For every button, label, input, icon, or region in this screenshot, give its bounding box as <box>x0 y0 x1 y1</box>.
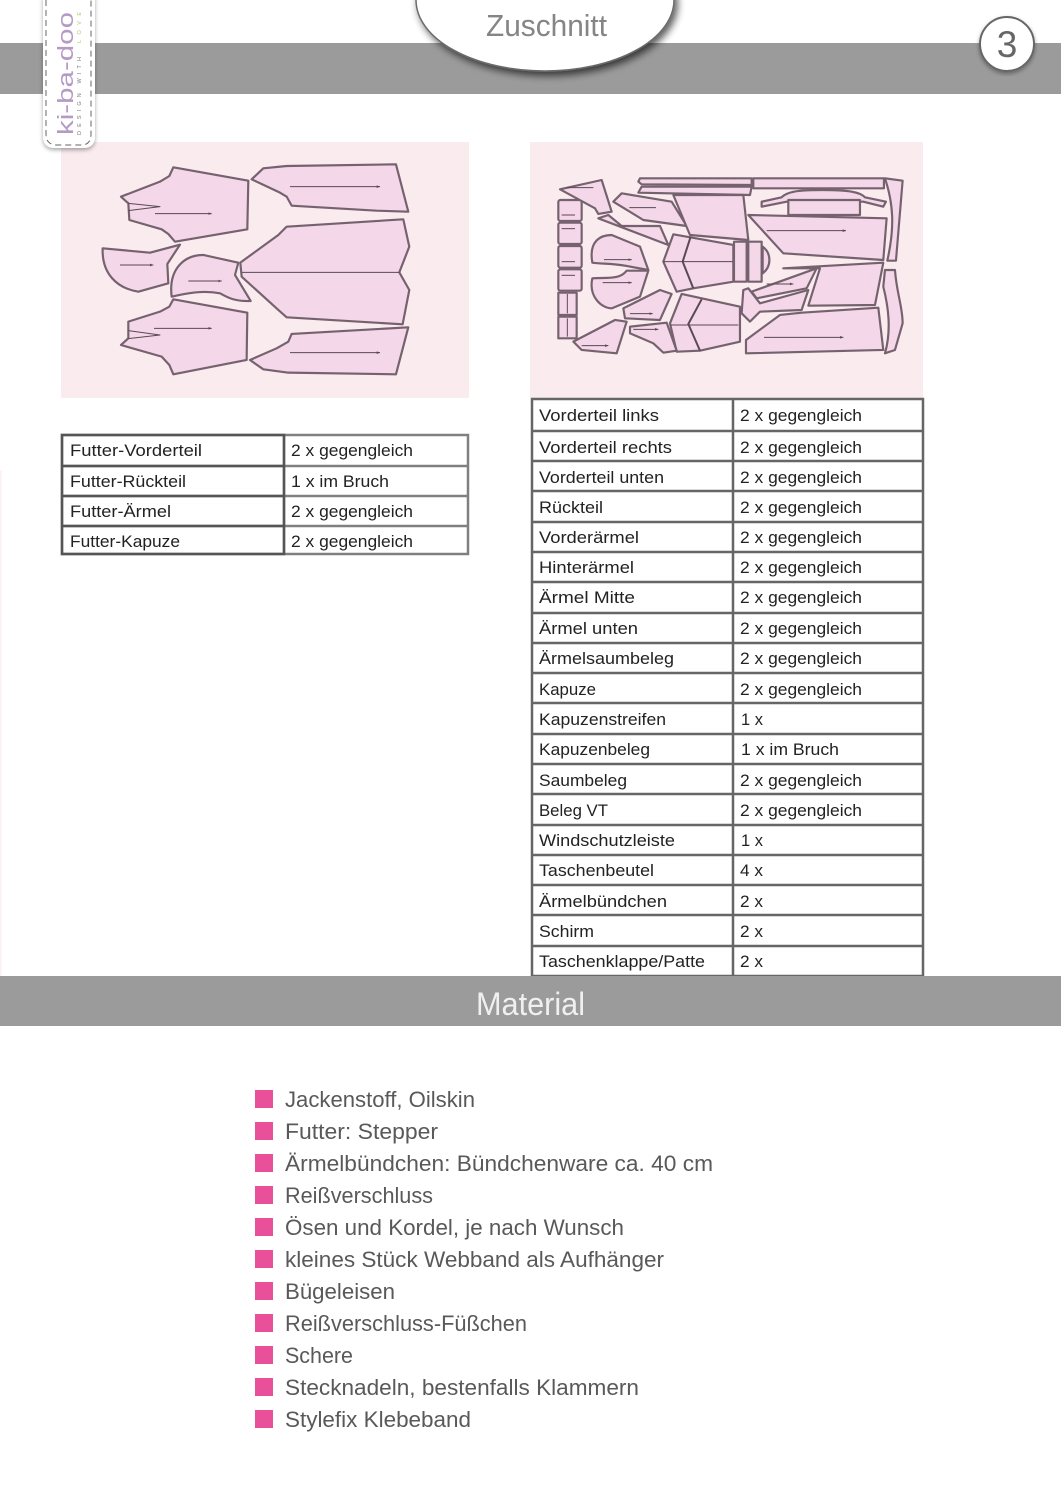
row: Ärmel unten: Ärmel unten <box>539 619 638 638</box>
pattern piece: lining hood <box>103 245 180 292</box>
row: Vorderteil links: 2 x gegengleich <box>740 406 862 425</box>
row: Taschenklappe/Patte: 2 x <box>740 952 763 971</box>
item: Webband: kleines Stück Webband als Aufhänger <box>285 1247 664 1272</box>
row: Kapuze <box>539 680 862 699</box>
row: Taschenklappe/Patte: Taschenklappe/Patte <box>539 952 705 971</box>
panel: pattern layout outer fabric <box>530 142 923 398</box>
row: Futter-Kapuze: 2 x gegengleich <box>291 532 413 551</box>
row: Rückteil: Rückteil <box>539 498 603 517</box>
row: Kapuzenbeleg <box>539 740 839 759</box>
row: Futter-Vorderteil: 2 x gegengleich <box>291 441 413 460</box>
row: Vorderteil links <box>539 406 862 425</box>
logo tag: ki-ba-doo: ki-ba-doo <box>53 12 78 135</box>
panel: pattern layout lining <box>61 142 469 398</box>
pattern piece: lining front top <box>121 167 248 242</box>
item: Stylefix Klebeband: Stylefix Klebeband <box>285 1407 471 1432</box>
row: Kapuzenstreifen <box>539 710 763 729</box>
row: Schirm <box>539 922 763 941</box>
pattern piece: lining front bottom <box>121 299 247 374</box>
table: lining cutting list <box>62 435 468 554</box>
row: Futter-Ärmel: Futter-Ärmel <box>70 502 171 521</box>
row: Saumbeleg <box>539 771 862 790</box>
row: Futter-Kapuze: Futter-Kapuze <box>70 532 180 551</box>
row: Ärmelbündchen <box>539 892 763 911</box>
pattern piece: lining sleeve top <box>252 164 408 212</box>
row: Kapuzenbeleg: 1 x im Bruch <box>741 740 839 759</box>
row: Kapuzenstreifen: Kapuzenstreifen <box>539 710 666 729</box>
pattern pieces: lower right front <box>742 263 883 353</box>
table: outer fabric cutting list <box>532 399 923 976</box>
title tab: Zuschnitt: Zuschnitt <box>486 8 607 43</box>
row: Schirm: 2 x <box>740 922 763 941</box>
row: Ärmel Mitte: 2 x gegengleich <box>740 588 862 607</box>
row: Kapuze: 2 x gegengleich <box>740 680 862 699</box>
pattern piece: upper sleeve top <box>673 195 748 240</box>
row: Futter-Rückteil <box>70 472 389 491</box>
row: Ärmel unten <box>539 619 862 638</box>
pattern piece: lining back <box>240 219 409 324</box>
logo tag: ki-ba-doo <box>43 0 95 148</box>
row: Ärmelsaumbeleg <box>539 649 862 668</box>
row: Hinterärmel: Hinterärmel <box>539 558 634 577</box>
row: Vorderärmel: 2 x gegengleich <box>740 528 862 547</box>
row: Schirm: Schirm <box>539 922 594 941</box>
row: Kapuzenstreifen: 1 x <box>741 710 763 729</box>
row: Saumbeleg: Saumbeleg <box>539 771 627 790</box>
row: Vorderteil rechts: Vorderteil rechts <box>539 438 672 457</box>
row: Windschutzleiste: 1 x <box>741 831 763 850</box>
pattern pieces: peak and pocket <box>762 190 886 215</box>
row: Rückteil: 2 x gegengleich <box>740 498 862 517</box>
pattern pieces: sleeve centre group <box>663 234 769 292</box>
row: Hinterärmel <box>539 558 862 577</box>
row: Vorderteil rechts: 2 x gegengleich <box>740 438 862 457</box>
row: Futter-Kapuze <box>70 532 413 551</box>
row: Futter-Vorderteil <box>70 441 413 460</box>
row: Kapuzenbeleg: Kapuzenbeleg <box>539 740 650 759</box>
row: Futter-Ärmel <box>70 502 413 521</box>
row: Kapuze: Kapuze <box>539 680 596 699</box>
row: Futter-Ärmel: 2 x gegengleich <box>291 502 413 521</box>
row: Rückteil <box>539 498 862 517</box>
row: Vorderteil links: Vorderteil links <box>539 406 659 425</box>
row: Futter-Vorderteil: Futter-Vorderteil <box>70 441 202 460</box>
section band: Material <box>0 976 1061 1026</box>
row: Ärmelsaumbeleg: Ärmelsaumbeleg <box>539 649 674 668</box>
page number badge: 3 <box>997 24 1017 65</box>
pattern pieces: upper left panels <box>560 180 687 245</box>
pattern pieces: small rectangles column <box>558 200 582 338</box>
item: Schere: Schere <box>285 1343 353 1368</box>
row: Taschenbeutel: Taschenbeutel <box>539 861 654 880</box>
pattern pieces: hood halves <box>592 235 648 308</box>
row: Ärmelsaumbeleg: 2 x gegengleich <box>740 649 862 668</box>
row: Beleg VT <box>539 801 862 820</box>
item: Futter: Stepper: Futter: Stepper <box>285 1119 438 1144</box>
item: Reißverschluss: Reißverschluss <box>285 1183 433 1208</box>
row: Beleg VT: 2 x gegengleich <box>740 801 862 820</box>
row: Vorderärmel <box>539 528 862 547</box>
item: Reißverschluss-Füßchen: Reißverschluss-Füßchen <box>285 1311 527 1336</box>
row: Vorderärmel: Vorderärmel <box>539 528 639 547</box>
page number badge <box>980 17 1034 71</box>
row: Ärmel Mitte: Ärmel Mitte <box>539 588 635 607</box>
item: Jackenstoff, Oilskin: Jackenstoff, Oilskin <box>285 1087 475 1112</box>
pattern pieces: lower sleeve group <box>573 290 740 353</box>
row: Windschutzleiste: Windschutzleiste <box>539 831 675 850</box>
row: Futter-Rückteil: Futter-Rückteil <box>70 472 186 491</box>
item: Ärmelbündchen: Ärmelbündchen: Bündchenware ca. 40 cm <box>285 1151 713 1176</box>
pattern piece: lining sleeve middle <box>171 255 251 301</box>
pattern piece: lining sleeve bottom <box>250 327 408 374</box>
item: Schere <box>255 1343 353 1368</box>
logo tag: ki-ba-doo: DESIGN WITH <box>77 57 83 135</box>
pattern piece: front upper <box>748 215 887 260</box>
item: Stecknadeln: Stecknadeln, bestenfalls Klammern <box>285 1375 639 1400</box>
row: Vorderteil rechts <box>539 438 862 457</box>
list: materials <box>255 1087 713 1432</box>
row: Beleg VT: Beleg VT <box>539 801 608 820</box>
row: Ärmel unten: 2 x gegengleich <box>740 619 862 638</box>
row: Vorderteil unten <box>539 468 862 487</box>
pattern pieces: long strips <box>638 178 903 353</box>
row: Windschutzleiste <box>539 831 763 850</box>
row: Ärmelbündchen: Ärmelbündchen <box>539 892 667 911</box>
item: Bügeleisen: Bügeleisen <box>285 1279 395 1304</box>
row: Futter-Rückteil: 1 x im Bruch <box>291 472 389 491</box>
section band: Material: Material <box>476 986 585 1022</box>
logo tag: ki-ba-doo: LOVE <box>77 12 83 43</box>
row: Ärmel Mitte <box>539 588 862 607</box>
row: Vorderteil unten: Vorderteil unten <box>539 468 664 487</box>
row: Taschenbeutel <box>539 861 763 880</box>
row: Taschenbeutel: 4 x <box>740 861 763 880</box>
row: Vorderteil unten: 2 x gegengleich <box>740 468 862 487</box>
row: Hinterärmel: 2 x gegengleich <box>740 558 862 577</box>
item: Ösen und Kordel: Ösen und Kordel, je nach Wunsch <box>285 1215 624 1240</box>
row: Saumbeleg: 2 x gegengleich <box>740 771 862 790</box>
row: Ärmelbündchen: 2 x <box>740 892 763 911</box>
title tab: Zuschnitt <box>416 0 674 71</box>
header band <box>0 43 1061 94</box>
